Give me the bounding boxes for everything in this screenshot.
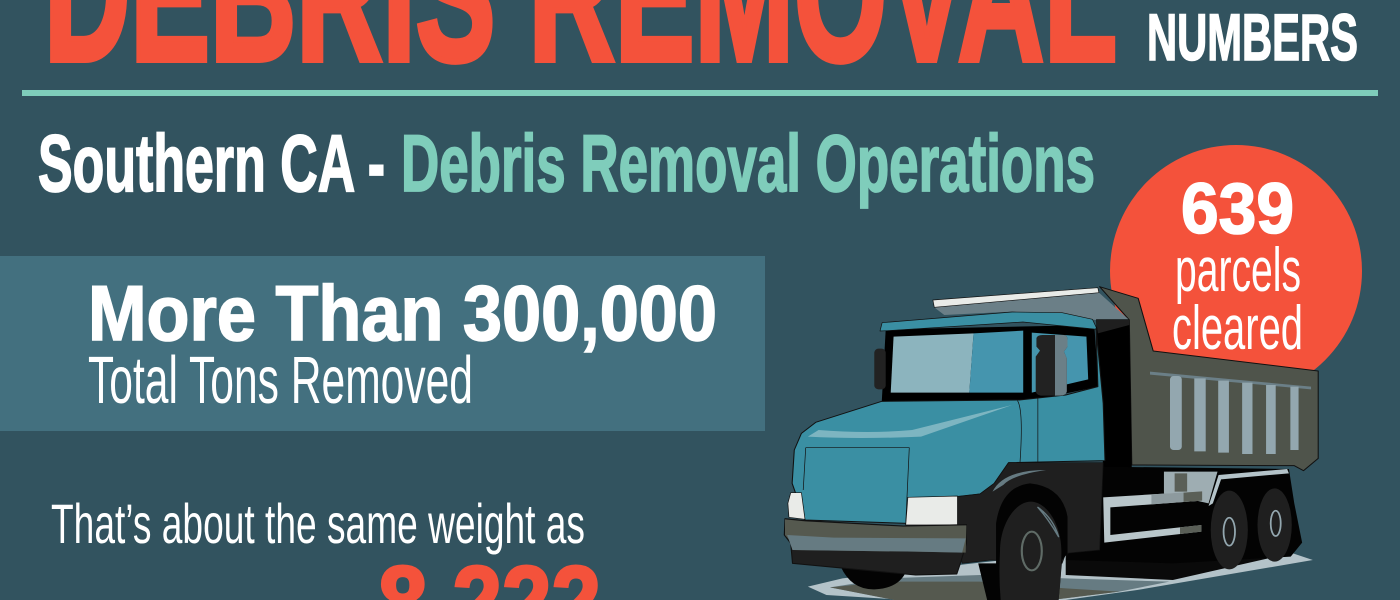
front wheel xyxy=(978,502,1061,600)
cab body xyxy=(792,328,1105,525)
heading: southern california operations xyxy=(38,119,1095,209)
label: total tons removed: Total Tons Removed xyxy=(88,343,473,418)
cab roof xyxy=(880,312,1097,331)
headlights xyxy=(788,493,957,525)
icon: dump truck xyxy=(784,287,1318,600)
text: comparison intro: That’s about the same weight as xyxy=(51,492,585,555)
door and hood lines xyxy=(803,398,1038,525)
front fender xyxy=(957,463,1103,563)
wheel arch xyxy=(996,483,1067,600)
panel: total tons removed xyxy=(0,256,765,431)
ground shadow xyxy=(808,553,1313,600)
stat: more than 300,000: More Than 300,000 xyxy=(88,269,717,357)
hood highlight xyxy=(808,405,1012,438)
canopy xyxy=(933,288,1132,470)
callout: 639 parcels cleared: parcels xyxy=(1175,236,1301,305)
rear wheels xyxy=(1211,488,1292,569)
heading: southern california operations: Southern CA - xyxy=(38,119,385,209)
callout: 639 parcels cleared xyxy=(1110,145,1362,397)
front bumper xyxy=(784,519,966,589)
dump bed xyxy=(1100,287,1318,471)
callout: 639 parcels cleared: cleared xyxy=(1172,294,1303,363)
chassis xyxy=(1066,467,1302,563)
side mirror xyxy=(1036,335,1067,396)
callout: 639 parcels cleared: 639 xyxy=(1181,170,1294,249)
cab frame and windows xyxy=(874,325,1099,401)
